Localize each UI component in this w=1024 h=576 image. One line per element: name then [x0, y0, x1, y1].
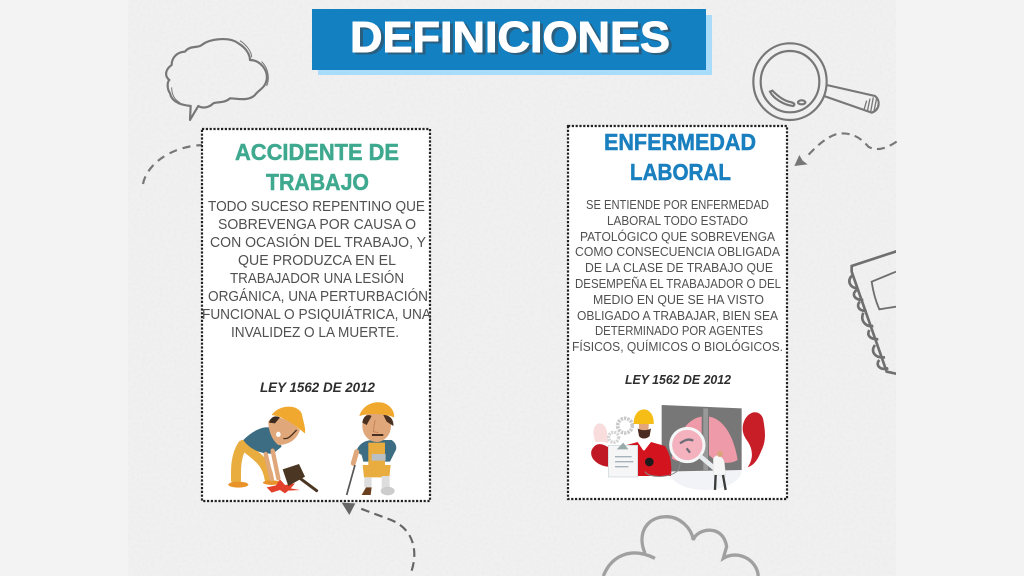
heading: accidente de trabajo: ACCIDENTE DE [235, 139, 399, 165]
text: accident definition: ORGÁNICA, UNA PERTURBACIÓN [208, 288, 428, 305]
text: accident definition: CON OCASIÓN DEL TRABAJO, Y [210, 234, 426, 251]
panel: enfermedad laboral [568, 126, 787, 499]
icon: speech cloud [166, 39, 268, 120]
title banner: DEFINICIONES [353, 15, 673, 64]
text: disease definition [572, 198, 783, 354]
worker hitting foot [228, 407, 317, 493]
text: accident definition: INVALIDEZ O LA MUERTE. [231, 324, 399, 341]
illustration: occupational disease x-ray [591, 405, 765, 490]
heading: accidente de trabajo: TRABAJO [266, 169, 369, 195]
text: accident definition: SOBREVENGA POR CAUSA O [218, 216, 416, 233]
text: law reference: LEY 1562 DE 2012 [260, 379, 375, 395]
text: law reference: LEY 1562 DE 2012 [625, 372, 732, 387]
text: disease definition: DE LA CLASE DE TRABAJO QUE [585, 261, 773, 275]
text: disease definition: PATOLÓGICO QUE SOBREVENGA [580, 229, 776, 244]
title banner: DEFINICIONES [350, 13, 670, 62]
text: disease definition: LABORAL TODO ESTADO [607, 214, 748, 228]
text: disease definition: FÍSICOS, QUÍMICOS O BIOLÓGICOS. [572, 339, 783, 354]
arrow: left dashed curve [143, 145, 202, 184]
text: disease definition: SE ENTIENDE POR ENFERMEDAD [586, 198, 769, 212]
worker on crutch [347, 402, 396, 495]
icon: bottom cloud [603, 517, 758, 576]
arrow: dashed curve to right card [794, 133, 897, 166]
text: disease definition: COMO CONSECUENCIA OBLIGADA [575, 245, 781, 259]
text: accident definition [202, 198, 431, 341]
text: accident definition: QUE PRODUZCA EN EL [238, 252, 396, 269]
text: disease definition: DESEMPEÑA EL TRABAJADOR O DEL [575, 277, 781, 291]
heading: enfermedad laboral [604, 129, 756, 185]
text: disease definition: DETERMINADO POR AGENTES [595, 324, 763, 338]
text: accident definition: TRABAJADOR UNA LESIÓN [230, 270, 404, 287]
panel: accidente de trabajo [202, 129, 431, 501]
text: disease definition: OBLIGADO A TRABAJAR, BIEN SEA [577, 309, 779, 323]
heading: accidente de trabajo [235, 139, 399, 195]
heading: enfermedad laboral: ENFERMEDAD [604, 129, 756, 155]
text: accident definition: FUNCIONAL O PSIQUIÁTRICA, UNA [202, 306, 431, 323]
heading: enfermedad laboral: LABORAL [630, 159, 731, 185]
illustration: injured workers [228, 402, 396, 495]
text: disease definition: MEDIO EN QUE SE HA VISTO [593, 293, 764, 307]
arrow: bottom dashed curve [342, 503, 414, 571]
icon: magnifying glass [753, 43, 879, 120]
text: accident definition: TODO SUCESO REPENTINO QUE [208, 198, 425, 215]
paper background [128, 0, 896, 576]
title banner [312, 9, 712, 75]
icon: spiral notebook [849, 251, 897, 374]
